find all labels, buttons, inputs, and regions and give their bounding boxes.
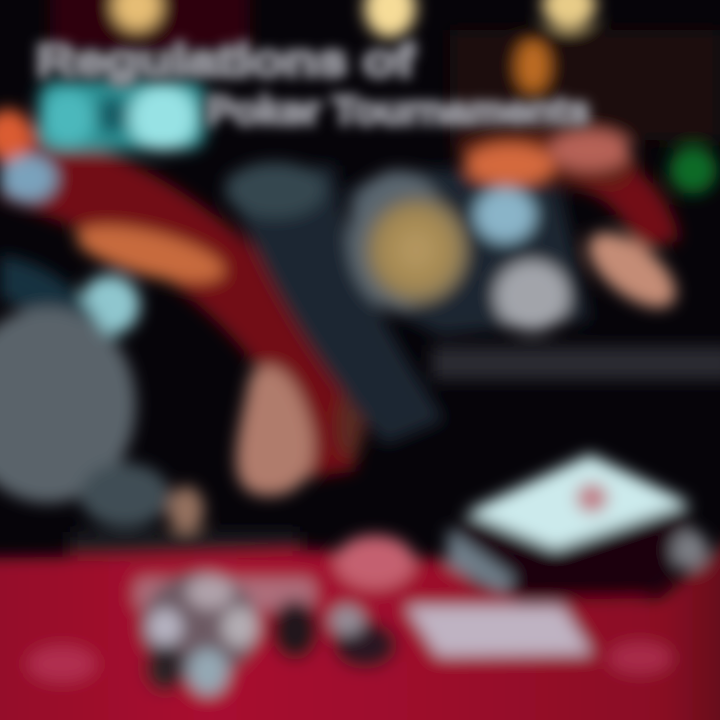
title: [36, 34, 590, 133]
icon: gold coin: [364, 196, 468, 304]
playing card on table: [406, 606, 592, 656]
title: Regulations of: [36, 34, 415, 86]
teal emblem behind title: [38, 80, 206, 151]
hand, centre: [236, 366, 364, 496]
background lights: [50, 0, 720, 194]
title: Poker Tournaments: [206, 89, 590, 133]
grey figure, left: [0, 307, 300, 556]
chair and figure: dark red drape, left: [0, 109, 358, 480]
red table surface: [0, 530, 720, 720]
card box on table: [447, 454, 708, 598]
right figure with coin: [345, 130, 720, 380]
dark suit figure, centre: [225, 162, 445, 445]
poker chips on table: [28, 535, 672, 695]
